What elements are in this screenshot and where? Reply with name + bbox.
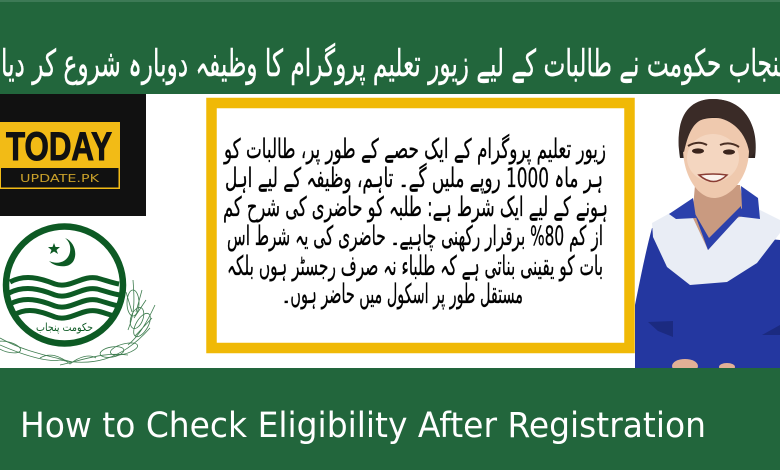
emblem urdu text: حکومت پنجاب bbox=[36, 321, 93, 334]
logo: Today Update.pk: UPDATE.PK bbox=[20, 172, 100, 185]
logo: Today Update.pk bbox=[0, 94, 146, 216]
face bbox=[683, 118, 749, 198]
paragraph text: مستقل طور پر اسکول میں حاضر ہوں۔ bbox=[282, 279, 523, 310]
river waves bbox=[9, 278, 120, 318]
top banner bbox=[0, 0, 780, 94]
bottom heading: How to Check Eligibility After Registration bbox=[20, 406, 706, 446]
crescent and star bbox=[49, 238, 75, 266]
collar bbox=[669, 186, 760, 250]
logo: Today Update.pk: TODAY bbox=[6, 125, 112, 169]
logo: Government of Punjab emblem bbox=[0, 226, 155, 365]
panel: yellow framed urdu text bbox=[212, 103, 630, 348]
neck bbox=[692, 185, 745, 250]
hair back bbox=[679, 99, 756, 158]
paragraph text: از کم 80% برقرار رکھنی چاہیے۔ حاضری کی یہ شرط اس bbox=[227, 221, 603, 252]
bottom banner bbox=[0, 368, 780, 470]
shawl bbox=[652, 210, 780, 285]
paragraph text bbox=[223, 133, 608, 310]
wheat wreath bbox=[0, 280, 155, 365]
hair top bbox=[679, 99, 755, 158]
robe bbox=[635, 228, 780, 368]
hands bbox=[672, 359, 698, 373]
smile bbox=[699, 174, 727, 182]
photo: smiling schoolgirl in blue uniform bbox=[635, 99, 780, 373]
eyes and brows bbox=[692, 148, 704, 154]
paragraph text: ہر ماہ 1000 روپے ملیں گے۔ تاہم، وظیفہ کے لیے اہل bbox=[225, 162, 603, 194]
